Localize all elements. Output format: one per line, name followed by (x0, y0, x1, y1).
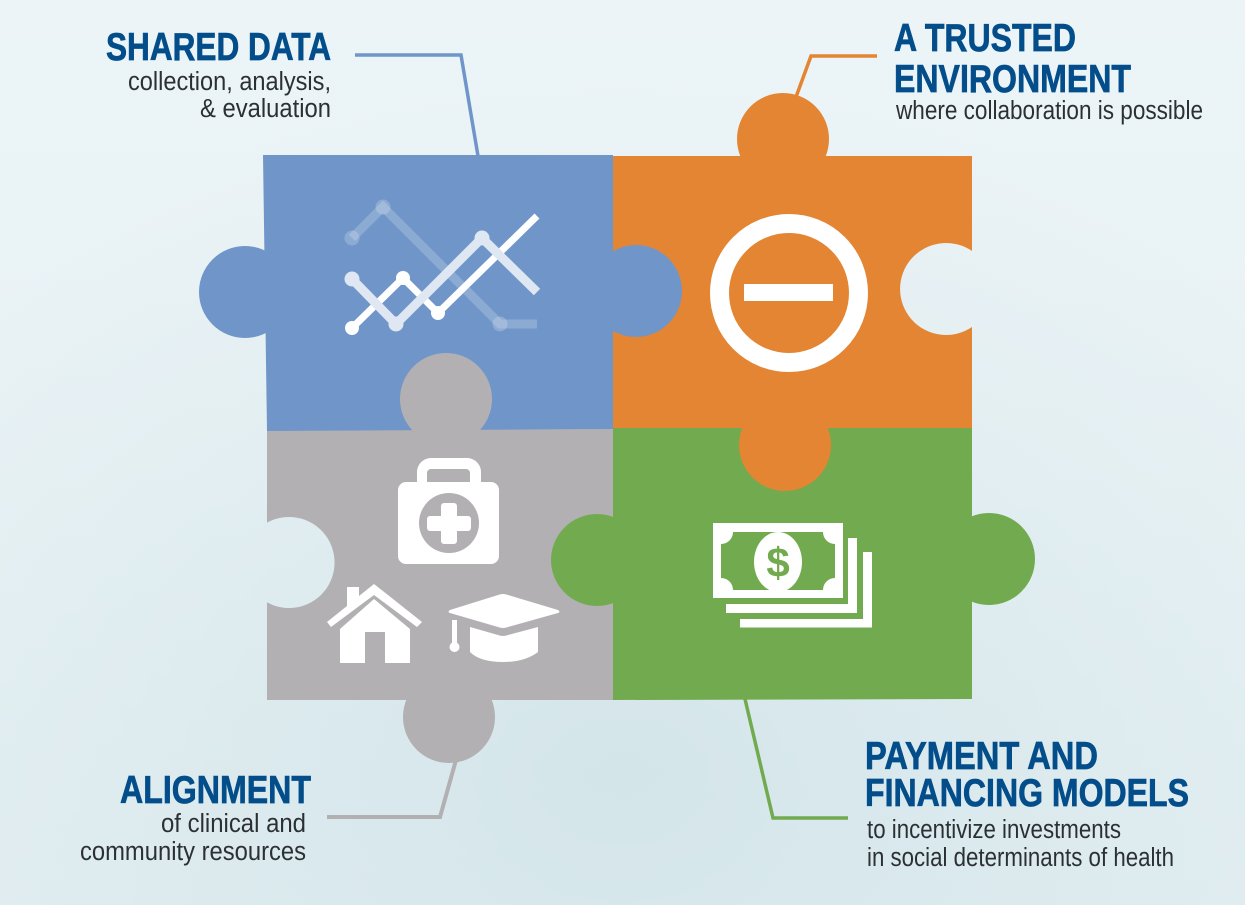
label: shared data: SHARED DATA (106, 26, 331, 69)
icon: stack of money: $ (766, 539, 790, 586)
icon: stack of money (713, 523, 872, 628)
puzzle piece: blue (199, 155, 682, 431)
icon: no-entry ring (720, 224, 858, 362)
connector line: shared data (355, 55, 478, 156)
puzzle knob: gray top (400, 353, 492, 445)
label: payment and financing models: to incentivize investments (867, 816, 1121, 844)
label: payment and financing models: PAYMENT AND (865, 735, 1098, 778)
label: a trusted environment: A TRUSTED (894, 17, 1076, 60)
label: a trusted environment: where collaboration is possible (895, 97, 1203, 125)
connector line: payment (745, 699, 848, 818)
label: shared data: collection, analysis, (128, 68, 331, 96)
label: shared data: & evaluation (200, 95, 331, 123)
icon: house (327, 584, 422, 663)
label: payment and financing models (865, 735, 1189, 872)
icon: medical kit (398, 458, 499, 564)
puzzle piece: green (613, 428, 1035, 700)
label: shared data (106, 26, 331, 123)
connector line: alignment (327, 760, 456, 817)
label: alignment: community resources (80, 838, 306, 866)
connector line: trusted environment (796, 56, 877, 97)
label: alignment (80, 769, 311, 866)
puzzle knob: orange bottom (739, 399, 831, 491)
puzzle piece: orange (613, 93, 972, 429)
puzzle knob: green left (551, 514, 643, 606)
icon: line chart (344, 200, 537, 335)
puzzle piece: gray (267, 429, 613, 763)
label: alignment: of clinical and (161, 810, 306, 838)
label: a trusted environment: ENVIRONMENT (894, 58, 1131, 101)
label: alignment: ALIGNMENT (120, 769, 311, 812)
label: payment and financing models: in social determinants of health (867, 844, 1174, 872)
icon: graduation cap (448, 594, 560, 662)
label: a trusted environment (894, 17, 1203, 125)
